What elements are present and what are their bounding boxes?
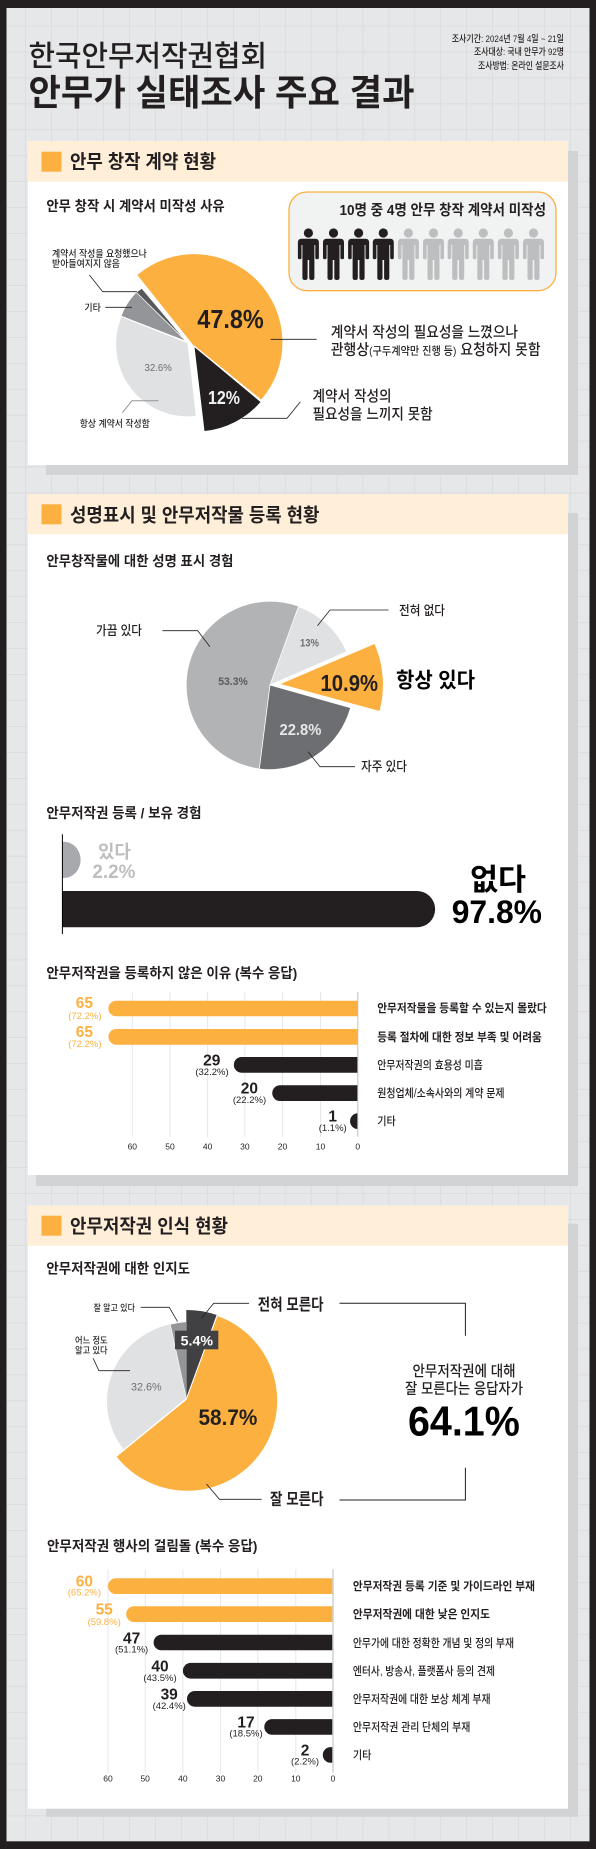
sub heading: 안무저작권 등록 / 보유 경험 [46,805,202,821]
section heading: 안무 창작 계약 현황 [70,151,216,173]
bar chart: reasons not registered: 30 [240,1142,250,1152]
bar chart: registration: 97.8% [452,894,542,930]
pie chart: name credit experience: 전혀 없다 [399,603,445,618]
bar chart: obstacles: (59.8%) [88,1617,121,1628]
pie chart: reasons for no contract: 항상 계약서 작성함 [80,418,150,430]
bar chart: obstacles: 안무저작권 등록 기준 및 가이드라인 부재 [353,1579,535,1593]
bar chart: reasons not registered: (32.2%) [195,1067,229,1078]
section heading: 안무저작권 인식 현황 [70,1216,228,1238]
survey meta [452,33,564,72]
bar chart: obstacles: 50 [140,1774,150,1784]
pie chart: awareness: 잘 모른다 [270,1490,324,1508]
callout: 64.1 percent: 안무저작권에 대해 [412,1363,516,1380]
callout: 4 out of 10 pictogram: 10명 중 4명 안무 창작 계약서 미작성 [340,202,546,219]
bar chart: reasons not registered: (1.1%) [319,1123,347,1134]
bar chart: obstacles: (42.4%) [153,1701,186,1712]
bar chart: reasons not registered: 20 [278,1142,287,1152]
callout: 4 out of 10 pictogram [289,192,556,291]
bar chart: obstacles: 47 [123,1630,140,1648]
bar chart: reasons not registered [68,992,547,1152]
pie chart: name credit experience: 13% [300,638,319,650]
pie chart: awareness: 알고 있다 [75,1344,108,1356]
panel: attribution and registration [28,494,578,1186]
bar chart: reasons not registered: 등록 절차에 대한 정보 부족 및 어려움 [377,1030,542,1044]
title line 2: 안무가 실태조사 주요 결과 [28,72,414,113]
pie chart: name credit experience: 22.8% [280,722,322,739]
pie chart: name credit experience: 53.3% [218,676,248,688]
pie chart: name credit experience: 10.9% [320,670,378,696]
pie chart: reasons for no contract: 계약서 작성을 요청했으나 [52,248,147,260]
bar chart: obstacles: (43.5%) [143,1673,177,1684]
icon: section square [42,504,62,524]
sub heading: 안무저작권 행사의 걸림돌 (복수 응답) [47,1538,257,1554]
panel: copyright awareness [28,1206,578,1817]
pie chart: reasons for no contract: 관행상(구두계약만 진행 등) 요청하지 못함 [331,342,541,358]
bar chart: obstacles: 20 [253,1774,263,1784]
pie chart: name credit experience [96,602,475,774]
bar chart: reasons not registered: 원청업체/소속사와의 계약 문제 [377,1086,505,1100]
bar chart: obstacles: (18.5%) [229,1728,263,1740]
bar chart: obstacles: 17 [237,1714,255,1732]
bar chart: reasons not registered: (22.2%) [233,1095,266,1106]
survey meta: 조사대상: 국내 안무가 92명 [474,46,564,58]
bar chart: obstacles: 40 [151,1658,169,1676]
bar chart: obstacles: 안무가에 대한 정확한 개념 및 정의 부재 [353,1636,514,1650]
bar chart: obstacles: (65.2%) [68,1588,101,1598]
bar chart: obstacles: 60 [103,1774,113,1784]
bar chart: obstacles: 0 [331,1774,336,1784]
bar chart: obstacles: 60 [76,1574,93,1590]
panel: contract status [28,141,578,475]
bar chart: registration: 있다 [98,842,131,862]
pie chart: reasons for no contract [52,248,541,431]
bar chart: reasons not registered: 10 [316,1142,325,1152]
bar chart: reasons not registered: 50 [165,1142,175,1152]
bar chart: obstacles: 2 [301,1742,309,1760]
bar chart: reasons not registered: 29 [203,1052,221,1070]
bar chart: reasons not registered: 1 [328,1108,337,1126]
bar chart: obstacles: 안무저작권 관리 단체의 부재 [353,1721,470,1734]
bar chart: reasons not registered: 안무저작권의 효용성 미흡 [377,1058,483,1072]
bar chart: obstacles: (51.1%) [115,1644,148,1656]
pie chart: awareness: 전혀 모른다 [258,1296,324,1314]
pie chart: awareness: 58.7% [198,1405,257,1430]
bar chart: obstacles: 39 [161,1686,178,1704]
bar chart: obstacles [68,1569,535,1784]
bar chart: registration: 없다 [470,864,526,897]
pie chart: name credit experience: 항상 있다 [396,670,475,692]
pie chart: reasons for no contract: 12% [208,388,240,408]
icon: section square [42,152,62,172]
pie chart: reasons for no contract: 필요성을 느끼지 못함 [312,406,433,423]
survey meta: 조사방법: 온라인 설문조사 [478,60,564,72]
bar chart: obstacles: 엔터사, 방송사, 플랫폼사 등의 견제 [353,1665,495,1678]
sub heading: 안무창작물에 대한 성명 표시 경험 [46,553,234,569]
bar chart: reasons not registered: 20 [241,1080,258,1098]
sub heading: 안무 창작 시 계약서 미작성 사유 [46,198,225,214]
sub heading: 안무저작권을 등록하지 않은 이유 (복수 응답) [46,965,297,981]
pie chart: reasons for no contract: 기타 [84,303,101,314]
bar chart: registration: 2.2% [92,862,135,883]
bar chart: obstacles: 10 [291,1774,301,1784]
pie chart: reasons for no contract: 계약서 작성의 필요성을 느꼈으나 [331,324,518,341]
bar chart: obstacles: 안무저작권에 대한 보상 체계 부재 [353,1692,490,1706]
pie chart: reasons for no contract: 47.8% [197,304,264,334]
sub heading: 안무저작권에 대한 인지도 [46,1260,190,1276]
bar chart: reasons not registered: 기타 [377,1115,396,1128]
bar chart: obstacles: 안무저작권에 대한 낮은 인지도 [353,1607,490,1621]
bar chart: obstacles: (2.2%) [291,1756,319,1768]
bar chart: obstacles: 55 [96,1602,113,1618]
section heading: 성명표시 및 안무저작물 등록 현황 [70,504,319,526]
bar chart: obstacles: 40 [178,1774,188,1784]
survey meta: 조사기간: 2024년 7월 4일 ~ 21일 [452,33,564,45]
bar chart: registration [62,834,542,934]
pie chart: awareness: 32.6% [131,1382,162,1394]
bar chart: reasons not registered: 65 [76,995,93,1012]
pie chart: reasons for no contract: 받아들여지지 않음 [52,258,120,270]
bar chart: reasons not registered: (72.2%) [68,1039,102,1050]
bar chart: obstacles: 기타 [353,1749,372,1762]
pie chart: name credit experience: 자주 있다 [361,759,407,774]
pie chart: name credit experience: 가끔 있다 [96,623,142,638]
icon: section square [42,1216,62,1236]
bar chart: reasons not registered: (72.2%) [68,1011,102,1022]
pie chart: awareness: 5.4% [181,1332,214,1348]
header [28,33,564,113]
bar chart: reasons not registered: 안무저작물을 등록할 수 있는지 몰랐다 [377,1001,547,1015]
title line 1: 한국안무저작권협회 [28,40,267,73]
bar chart: reasons not registered: 40 [203,1142,213,1152]
bar chart: reasons not registered: 0 [355,1142,360,1152]
icon: people row [298,228,544,280]
pie chart: awareness: 어느 정도 [75,1334,108,1346]
callout: 64.1 percent: 64.1% [408,1398,520,1445]
pie chart: awareness: 잘 알고 있다 [94,1302,136,1313]
pie chart: awareness [75,1296,324,1508]
callout: 64.1 percent [340,1303,523,1500]
bar chart: obstacles: 30 [216,1774,225,1784]
pie chart: reasons for no contract: 계약서 작성의 [312,388,392,405]
bar chart: reasons not registered: 65 [76,1024,93,1041]
pie chart: reasons for no contract: 32.6% [144,363,172,374]
bar chart: reasons not registered: 60 [128,1142,137,1152]
callout: 64.1 percent: 잘 모른다는 응답자가 [405,1380,523,1398]
